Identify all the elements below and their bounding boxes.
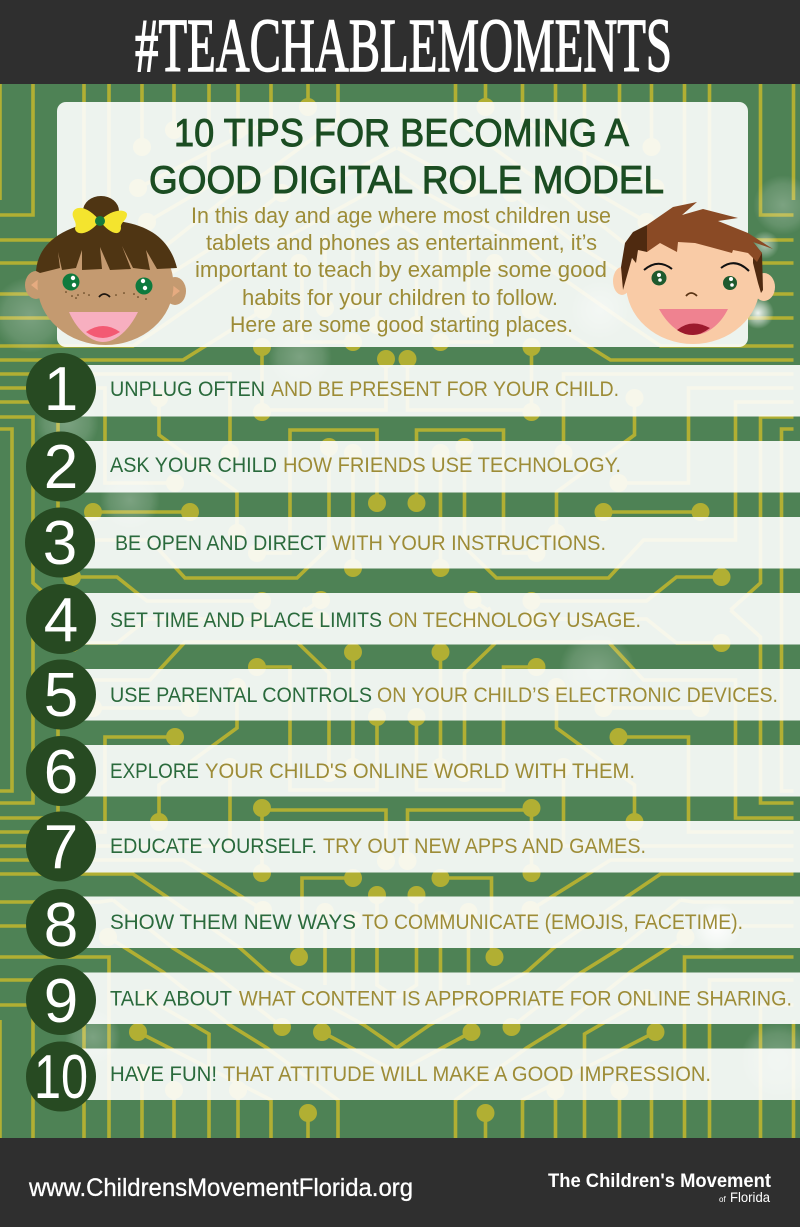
icon: girl face [25,196,186,345]
tip 10: THAT ATTITUDE WILL MAKE A GOOD IMPRESSION. [223,1063,711,1086]
tip 4: 4 [44,586,78,655]
intro text: habits for your children to follow. [242,285,558,310]
logo wordmark: Florida [730,1189,770,1205]
tip 2 [26,432,621,502]
tip 4: SET TIME AND PLACE LIMITS [110,609,382,632]
tip 9: TALK ABOUT [110,988,232,1010]
tip 5 [26,660,778,730]
tip 9 [26,965,792,1036]
tip 1: AND BE PRESENT FOR YOUR CHILD. [271,378,619,401]
tip 5: ON YOUR CHILD’S ELECTRONIC DEVICES. [377,684,778,707]
footer bar [0,1138,800,1227]
logo wordmark: of [719,1195,726,1204]
lens glows [0,175,800,1098]
tip 6: EXPLORE [110,760,199,783]
icon: boy face [613,202,775,344]
tip 2: HOW FRIENDS USE TECHNOLOGY. [283,454,621,477]
tip 8: SHOW THEM NEW WAYS [110,911,356,934]
panel heading: 10 TIPS FOR BECOMING A [174,112,629,155]
tip 8 [26,889,743,960]
tip 1: UNPLUG OFTEN [110,378,265,401]
header bar [0,0,800,84]
tip 6 [26,736,635,807]
tip 10 [26,1042,711,1112]
intro panel background [57,102,748,347]
tip 5: USE PARENTAL CONTROLS [110,684,372,707]
tip 5: 5 [44,661,78,730]
website url: www.ChildrensMovementFlorida.org [28,1174,413,1202]
logo wordmark [548,1171,772,1205]
tip 7: TRY OUT NEW APPS AND GAMES. [323,835,646,858]
tip 2: ASK YOUR CHILD [110,454,277,477]
tip 3 [25,508,606,578]
tip 8: 8 [44,891,78,960]
tip 3: WITH YOUR INSTRUCTIONS. [332,532,606,555]
tip 4: ON TECHNOLOGY USAGE. [388,609,641,632]
intro text: Here are some good starting places. [230,312,573,337]
tip 10: 10 [34,1043,88,1112]
tip strips [80,365,800,1100]
tip 1: 1 [44,355,78,424]
tip 9: 9 [44,967,78,1036]
tip 6: YOUR CHILD'S ONLINE WORLD WITH THEM. [205,760,635,783]
intro text: important to teach by example some good [195,257,607,282]
tip 6: 6 [44,738,78,807]
intro text: In this day and age where most children use [191,203,611,228]
tip 3: BE OPEN AND DIRECT [115,532,326,555]
logo wordmark: The Children's Movement [548,1171,772,1192]
intro text [191,203,611,337]
panel heading [149,112,664,202]
tip 8: TO COMMUNICATE (EMOJIS, FACETIME). [362,911,743,934]
tip 3: 3 [43,509,77,578]
tip 4 [26,584,641,655]
tip 2: 2 [44,433,78,502]
tip 1 [26,353,619,424]
panel heading: GOOD DIGITAL ROLE MODEL [149,159,664,202]
intro text: tablets and phones as entertainment, it’s [206,230,597,255]
tip 10: HAVE FUN! [110,1063,217,1086]
tip 7: 7 [44,813,78,882]
tip 7 [26,812,646,882]
tip 7: EDUCATE YOURSELF. [110,835,317,858]
